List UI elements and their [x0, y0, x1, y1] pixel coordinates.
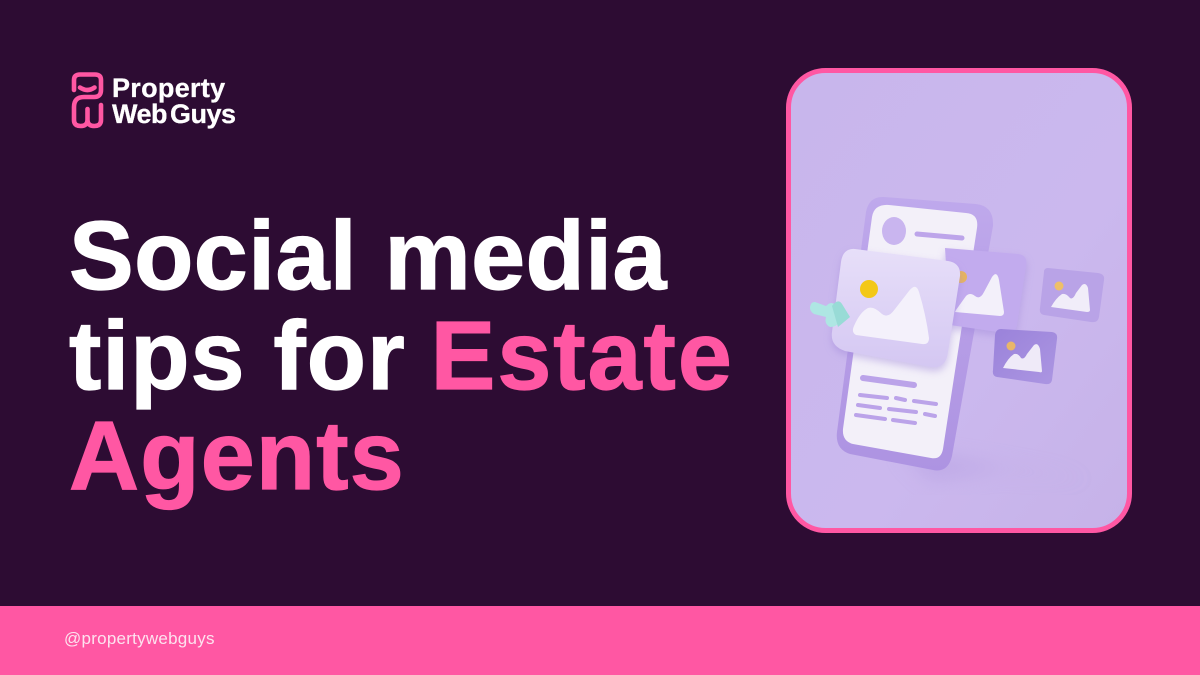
small image card: back [945, 248, 1026, 333]
logo wordmark line 1: Property [112, 73, 225, 103]
logo wordmark line 2: Web Guys [112, 99, 236, 129]
title [69, 201, 734, 510]
logo [72, 72, 236, 129]
icon: logo mark [72, 72, 104, 128]
title line 3: Agents [69, 401, 405, 510]
small image card: right [1040, 268, 1104, 322]
phone [837, 197, 1090, 480]
small image card: lower [993, 329, 1057, 384]
profile line [917, 234, 962, 238]
title line 1: Social media [69, 201, 667, 310]
icon: teal pin [810, 301, 850, 327]
footer bar [0, 606, 1200, 675]
text lines [856, 378, 936, 423]
image frame [788, 70, 1130, 530]
mountain [853, 287, 929, 344]
profile circle [882, 217, 906, 245]
main image card [832, 249, 960, 367]
social handle: @propertywebguys [64, 629, 215, 648]
title line 2: tips for Estate [69, 301, 734, 410]
sun [860, 280, 878, 298]
